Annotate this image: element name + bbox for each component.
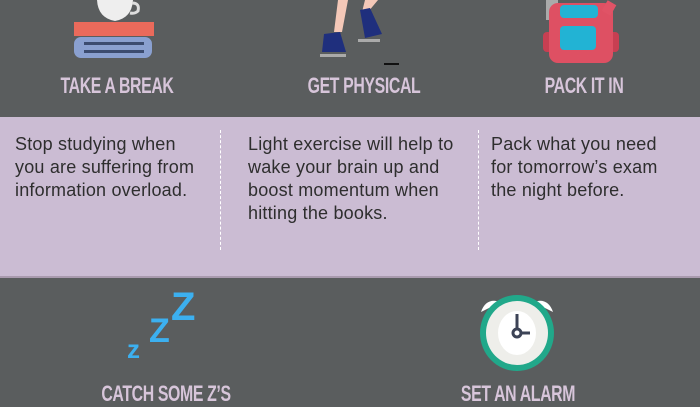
heading: catch some z's: CATCH SOME Z’S (101, 381, 231, 406)
icon: running legs (320, 0, 399, 65)
heading: pack it in: PACK IT IN (545, 73, 623, 98)
text: pack it in: Pack what you need for tomorrow’s exam the night before. (491, 134, 658, 200)
heading: take a break: TAKE A BREAK (60, 73, 174, 98)
panel: tips band (0, 117, 700, 278)
heading: set an alarm: SET AN ALARM (461, 381, 575, 406)
text: take a break: Stop studying when you are suffering from information overload. (15, 134, 194, 200)
icon: books and cup (74, 0, 154, 58)
icon: zzz: Z (149, 312, 170, 350)
icon: alarm clock (480, 295, 554, 371)
icon: zzz: z (127, 334, 140, 364)
text: get physical: Light exercise will help to wake your brain up and boost momentum when hitting the books. (248, 134, 454, 223)
heading: get physical: GET PHYSICAL (308, 73, 420, 98)
icon: zzz (127, 290, 195, 364)
icon: backpack (543, 0, 619, 63)
